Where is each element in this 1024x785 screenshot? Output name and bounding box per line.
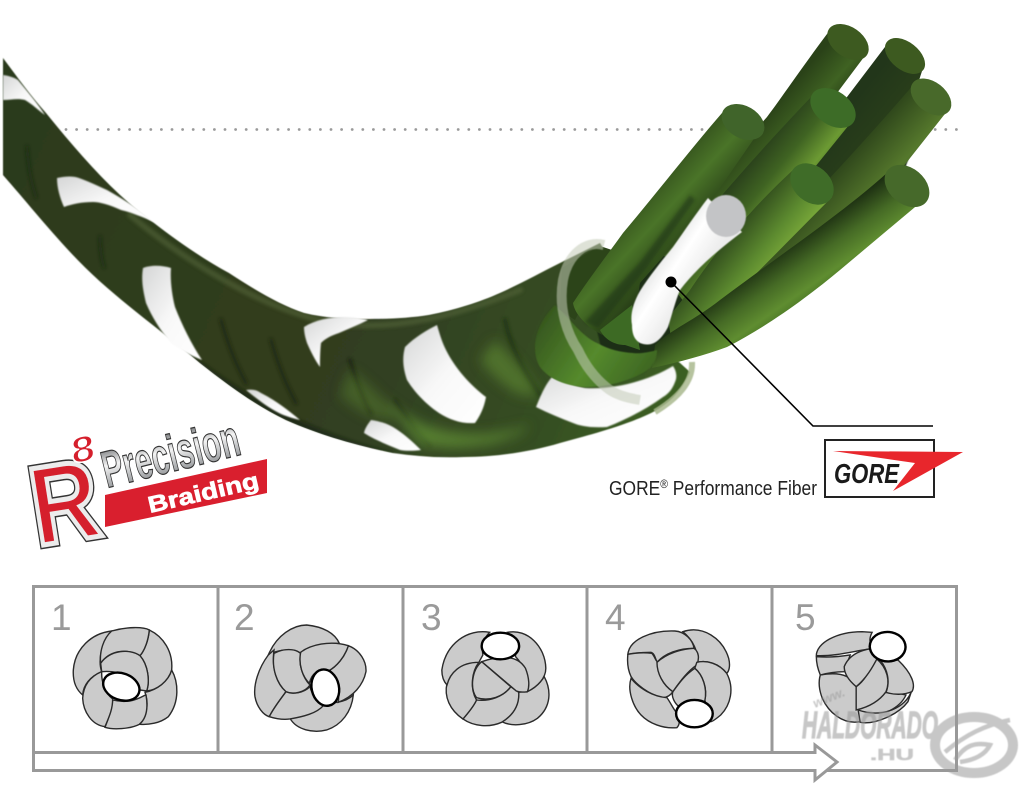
GORE Performance Fiber label: ® <box>660 477 668 491</box>
white fibre patches <box>3 75 676 451</box>
red arrow <box>833 451 963 491</box>
progress arrow <box>34 745 837 780</box>
fibre strands fanning out <box>535 17 958 387</box>
step 3 <box>421 597 549 726</box>
number 4: 4 <box>605 597 626 638</box>
strand: lower green stub <box>600 305 640 350</box>
strand: back top <box>650 17 875 280</box>
knot 4 <box>628 630 731 728</box>
watermark <box>802 684 1013 773</box>
strand: bright front <box>668 155 842 345</box>
number 5: 5 <box>795 597 816 638</box>
green highlights on lower braid <box>340 340 538 448</box>
knot 1 <box>73 628 177 729</box>
R8 Precision Braiding logo <box>21 409 267 570</box>
GORE Performance Fiber label: Performance Fiber <box>668 478 817 500</box>
step 2 <box>234 597 366 731</box>
step 5 <box>795 597 913 723</box>
watermark .HU: .HU <box>870 747 914 764</box>
strand: left front <box>573 97 771 345</box>
red banner <box>105 459 267 527</box>
knot 3 <box>442 632 549 726</box>
strand: bright centre top <box>660 80 863 310</box>
leader line to GORE callout <box>666 276 933 426</box>
dotted reference line <box>66 128 960 131</box>
step 4 <box>605 597 731 728</box>
translucent ring around the line <box>562 244 692 412</box>
Braiding text: Braiding <box>145 467 261 518</box>
Precision text: Precision <box>96 409 246 500</box>
watermark ring emblem <box>935 717 1013 773</box>
braid shading <box>0 147 540 456</box>
frame <box>34 586 956 770</box>
strand: lower front <box>652 156 938 368</box>
R8 Precision Braiding logo: R <box>21 436 108 570</box>
rope silhouette <box>3 58 690 457</box>
braid sequence panel <box>34 586 956 780</box>
knot 5 <box>816 627 913 723</box>
number 2: 2 <box>234 597 255 638</box>
knot 2 <box>255 625 366 731</box>
braided line body <box>0 58 690 457</box>
strand: back dark <box>760 31 932 270</box>
step 1 <box>51 597 177 729</box>
GORE wordmark: GORE <box>834 458 900 489</box>
superscript 8: 8 <box>70 426 96 472</box>
number 1: 1 <box>51 597 72 638</box>
GORE logo <box>825 440 963 497</box>
ring interior shadow <box>560 246 612 320</box>
watermark www: www. <box>811 684 847 711</box>
base dark bundle <box>590 115 925 365</box>
GORE Performance Fiber label: GORE <box>609 478 668 500</box>
big R: R <box>21 436 108 570</box>
wrap lobe over the knot <box>535 305 657 387</box>
strand: right back <box>740 71 958 310</box>
strand: white fibre <box>631 195 746 344</box>
number 3: 3 <box>421 597 442 638</box>
